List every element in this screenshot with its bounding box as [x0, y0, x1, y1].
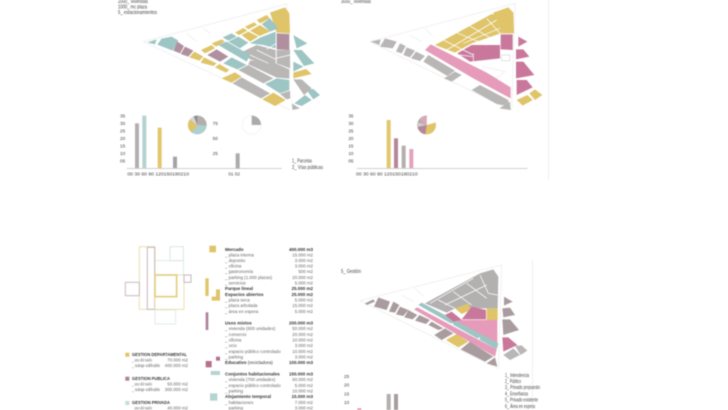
- program table: 10.000 m2: [292, 338, 314, 342]
- legend item: departmental: [125, 352, 189, 368]
- legend item: public: GESTION PUBLICA: [132, 376, 171, 381]
- legend: management categories: 2_ Público: [505, 379, 521, 385]
- program table: 400.000 m3: [289, 247, 313, 252]
- legend: management categories: 6_ Área en espera: [505, 403, 535, 410]
- program table: 10.000 m2: [292, 349, 314, 354]
- program table: 60.000 m2: [292, 377, 314, 382]
- pie chart: housing: [417, 116, 436, 134]
- program table: Espacios abiertos: [225, 292, 264, 297]
- program table: 20.000 m2: [292, 275, 314, 280]
- program table: _ parking (1.000 plazas): [224, 275, 273, 280]
- program table: 5.000 m2: [295, 298, 314, 302]
- legend item: public: 50.000 m2: [167, 382, 189, 386]
- legend: management categories: 4_ Enseñanza: [505, 392, 528, 398]
- legend item: private: GESTION PRIVADA: [132, 400, 171, 405]
- legend: management categories: [505, 373, 540, 410]
- program table: 500 m2: [298, 269, 314, 274]
- program table: _ ocio: [224, 343, 237, 348]
- bar chart: management: 10: [344, 400, 350, 405]
- program table: _ deposito: [224, 258, 246, 263]
- legend item: departmental: _ subaje edificable: [131, 363, 160, 368]
- program table: Conjuntos habitacionales: [225, 372, 280, 376]
- program table: Educativo (recicladora): [225, 360, 273, 365]
- bar chart: housing: 10: [348, 151, 354, 156]
- bar chart: parcels: 25: [120, 129, 126, 134]
- diagram: program massing outlines: [125, 247, 191, 324]
- program table: 10.000 m2: [292, 388, 314, 394]
- legend: parcels and roads: [292, 158, 323, 171]
- map 1: parcels by use: [143, 4, 320, 110]
- bar chart: housing: 35: [348, 113, 354, 118]
- program table: 3.000 m2: [295, 354, 314, 360]
- program table: Parque lineal: [225, 286, 253, 291]
- legend item: public: _ uso del suelo: [131, 382, 152, 386]
- program table: _ habitaciones: [224, 400, 254, 405]
- bar chart: management: [344, 374, 398, 410]
- program table: _ servicios: [224, 280, 247, 286]
- pie chart: parcels: [188, 116, 207, 134]
- program table: _ vivienda (700 unidades): [224, 377, 276, 382]
- program table: _ plaza arbolada: [224, 303, 258, 308]
- bar chart: housing: 20: [348, 136, 354, 141]
- caption: top left program: [118, 0, 157, 16]
- program table: _ oficina: [224, 264, 242, 268]
- frame line: bottom right panel: [532, 260, 533, 410]
- program table: Mercado: [225, 247, 244, 252]
- legend: management categories: 3_ Privado propuesto: [505, 385, 540, 391]
- program table: 15.000 m3: [291, 394, 313, 399]
- bar chart: management: 15: [344, 391, 350, 396]
- bar chart: housing: 00 30 60 90 120150180210: [356, 172, 418, 177]
- program table: 20.000 m2: [292, 332, 314, 337]
- program table: 200.000 m3: [289, 320, 313, 326]
- pie chart: public roads: [242, 116, 261, 134]
- legend: parcels and roads: 1_ Parcelas: [292, 158, 312, 164]
- bar chart: parcels: 30: [120, 121, 126, 126]
- bar chart: public roads: 75: [213, 121, 218, 126]
- program table: 25.000 m2: [291, 286, 313, 291]
- bar chart: housing: 25: [348, 129, 354, 134]
- bar chart: public roads: [213, 121, 240, 177]
- program table: _ espacio público controlado: [224, 383, 281, 388]
- map 2: housing distribution: [370, 3, 542, 110]
- program table: 25.000 m2: [291, 292, 313, 297]
- caption: management map: 5_ Gestión: [341, 269, 361, 275]
- program table: 15.000 m2: [292, 252, 314, 258]
- bar chart: housing: 30: [348, 121, 354, 126]
- bar chart: parcels: 15: [120, 144, 126, 149]
- legend item: departmental: GESTION DEPARTAMENTAL: [132, 352, 187, 357]
- bar chart: public roads: 50: [213, 136, 218, 141]
- legend item: public: 300.000 m2: [165, 387, 189, 392]
- legend item: public: _ subaje edificable: [131, 387, 160, 392]
- program table: _ oficina: [224, 338, 242, 342]
- program table: _ plaza interna: [224, 252, 254, 258]
- program table: 3.000 m2: [295, 343, 314, 348]
- program table: [224, 247, 314, 410]
- bar chart: management: 25: [344, 374, 350, 379]
- bar chart: parcels: 05: [120, 159, 126, 164]
- program table: 7.000 m2: [295, 400, 314, 405]
- legend item: departmental: _ uso del suelo: [131, 358, 152, 362]
- legend: management categories: 1_ Intendencia: [505, 373, 529, 379]
- bar chart: housing: 15: [348, 144, 354, 149]
- program table: 100.000 m3: [289, 360, 313, 365]
- legend item: departmental: 400.000 m2: [165, 363, 189, 368]
- program table: _ comercio: [224, 332, 247, 337]
- bar chart: housing: [348, 113, 527, 177]
- program swatches: [205, 246, 220, 401]
- program table: 3.000 m2: [295, 258, 314, 263]
- bar chart: parcels: [120, 113, 282, 177]
- legend: management categories: 5_ Privado existente: [505, 398, 538, 404]
- bar chart: public roads: 01 02: [228, 172, 240, 177]
- program table: _ plaza seca: [224, 298, 250, 302]
- program table: _ espacio público controlado: [224, 349, 281, 354]
- legend item: departmental: 70.000 m2: [167, 358, 189, 362]
- bar chart: public roads: 25: [213, 151, 218, 156]
- bar chart: parcels: 10: [120, 151, 126, 156]
- program table: 5.000 m2: [295, 383, 314, 388]
- program table: _ vivienda (600 unidades): [224, 326, 276, 331]
- bar chart: parcels: 20: [120, 136, 126, 141]
- program table: 50.000 m2: [292, 326, 314, 331]
- program table: _ gastronomía: [224, 269, 254, 274]
- legend: parcels and roads: 2_ Vías públicas: [292, 165, 323, 171]
- program table: _ parking: [224, 354, 244, 360]
- program table: _ área en espera: [224, 309, 259, 314]
- program table: 150.000 m3: [289, 372, 313, 376]
- map 3: management zones: [360, 265, 527, 368]
- frame line: top right panel: [548, 0, 549, 180]
- program table: 5.000 m2: [295, 309, 314, 314]
- caption: top left program: 1000_ mc plaza: [118, 4, 147, 10]
- program table: Alojamiento temporal: [225, 394, 271, 399]
- program table: 15.000 m2: [292, 303, 314, 308]
- caption: top left program: 5_ estacionamientos: [118, 10, 157, 16]
- program table: _ parking: [224, 388, 244, 394]
- bar chart: management: 20: [344, 383, 350, 388]
- program table: Usos mixtos: [225, 320, 252, 326]
- legend: management types: [125, 352, 189, 410]
- legend item: private: [125, 400, 189, 410]
- legend item: public: [125, 376, 189, 392]
- program table: 5.000 m2: [295, 280, 314, 286]
- program table: 3.000 m2: [295, 264, 314, 268]
- bar chart: parcels: 35: [120, 113, 126, 118]
- bar chart: housing: 05: [348, 159, 354, 164]
- bar chart: parcels: 00 30 60 90 120150180210: [127, 172, 189, 177]
